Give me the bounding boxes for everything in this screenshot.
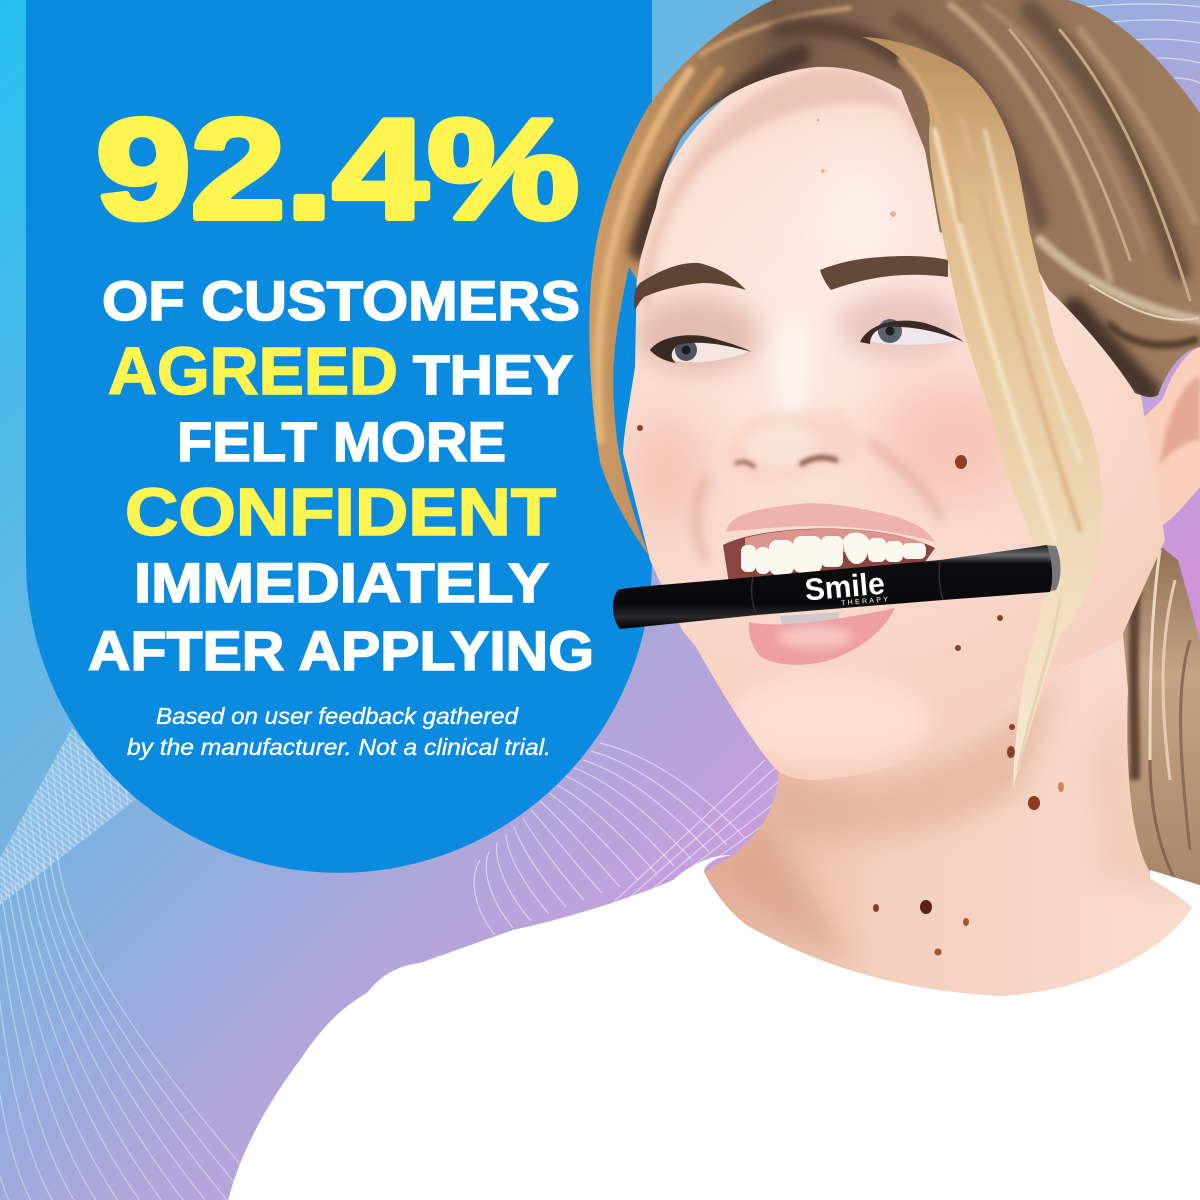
eye socket shading left bbox=[636, 297, 760, 373]
left cheek blush bbox=[630, 410, 706, 530]
hair streaks bbox=[598, 5, 1200, 440]
mouth interior bbox=[723, 528, 935, 590]
nose bridge highlight bbox=[772, 324, 812, 412]
ponytail bbox=[1118, 530, 1200, 890]
blue text panel bbox=[26, 0, 652, 873]
product: Smile Therapy pen bbox=[613, 545, 1060, 629]
nose bbox=[724, 410, 864, 483]
lower teeth bbox=[780, 612, 840, 625]
statement text: IMMEDIATELY bbox=[134, 551, 549, 614]
chin tone bbox=[730, 675, 930, 765]
footnote: by the manufacturer. Not a clinical trial. bbox=[127, 734, 551, 760]
blonde front strand bbox=[862, 37, 1102, 787]
wave graphic: lower left bbox=[0, 728, 275, 1200]
lower lip bbox=[749, 608, 895, 665]
pen logo text: THERAPY bbox=[841, 596, 889, 607]
eye socket shading right bbox=[838, 291, 962, 359]
eyebrow right bbox=[820, 256, 948, 290]
footnote: Based on user feedback gathered bbox=[156, 703, 519, 729]
eye right bbox=[860, 319, 964, 345]
moles and freckles bbox=[637, 118, 1064, 956]
statement text: THEY bbox=[413, 343, 573, 406]
pen body bbox=[613, 545, 1052, 629]
face bbox=[623, 66, 1165, 780]
eyebrow left bbox=[634, 263, 746, 310]
eye left bbox=[650, 335, 752, 363]
statement text: OF CUSTOMERS bbox=[102, 269, 580, 332]
statement text: FELT MORE bbox=[177, 410, 506, 473]
pen end cap bbox=[1044, 545, 1060, 592]
ear bbox=[1112, 347, 1200, 536]
wave graphic: center right bbox=[474, 743, 785, 935]
nasolabial folds bbox=[696, 440, 941, 560]
right cheek blush bbox=[875, 375, 1025, 505]
statement text: AGREED bbox=[108, 334, 398, 409]
statement text bbox=[88, 269, 594, 682]
wave graphic: top right bbox=[1084, 4, 1200, 83]
pen logo text: Smile bbox=[803, 566, 886, 607]
upper lip bbox=[726, 503, 935, 542]
neck bbox=[704, 600, 1194, 996]
statement text: AFTER APPLYING bbox=[88, 619, 594, 682]
footnote bbox=[127, 703, 551, 760]
headline statistic: 92.4% bbox=[96, 90, 579, 249]
gums bbox=[745, 529, 925, 552]
hair cap bbox=[589, 0, 1200, 557]
hairline shadow bbox=[637, 69, 930, 310]
statement text: CONFIDENT bbox=[125, 475, 556, 550]
upper teeth bbox=[741, 532, 926, 575]
forehead highlight bbox=[819, 158, 904, 254]
white shirt bbox=[227, 855, 1200, 1200]
mouth bbox=[723, 503, 935, 665]
